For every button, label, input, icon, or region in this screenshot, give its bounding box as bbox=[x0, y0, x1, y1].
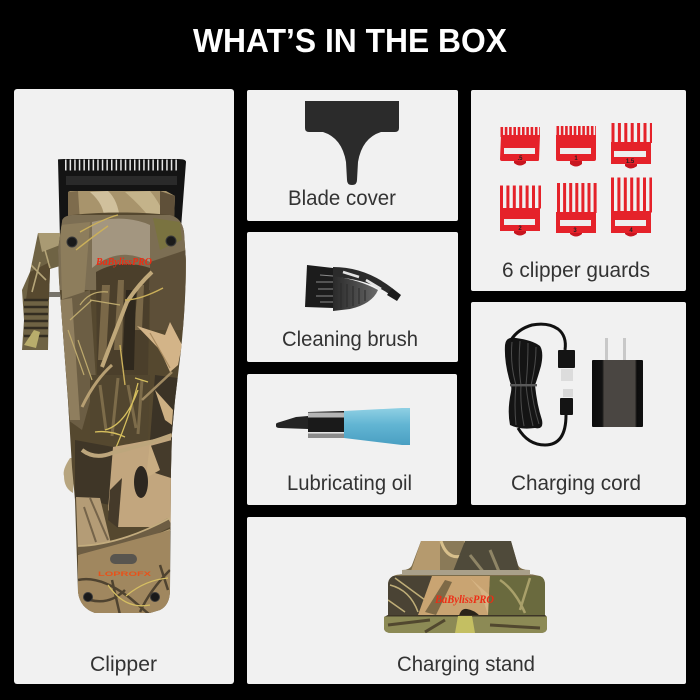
panel: charging stand bbox=[247, 517, 686, 684]
tube nozzle bbox=[276, 416, 308, 429]
guard .5 bbox=[500, 132, 540, 166]
icon: six red guards bbox=[500, 131, 652, 236]
label: charging cord: Charging cord bbox=[511, 472, 641, 495]
cord loops bbox=[511, 324, 566, 445]
usb-a plug bbox=[558, 350, 575, 368]
brush handle arm bbox=[333, 267, 392, 294]
body side bump bbox=[64, 458, 75, 493]
clipper body with camouflage bbox=[55, 210, 190, 615]
guard 3: 3 bbox=[573, 228, 577, 234]
clipper side lever bbox=[22, 233, 60, 350]
icon: oil tube bbox=[276, 408, 410, 445]
clipper model mark: LOPROFX bbox=[98, 572, 151, 578]
panel: cleaning brush bbox=[247, 232, 458, 362]
guard .5: .5 bbox=[517, 156, 523, 162]
guard 2: 2 bbox=[518, 226, 522, 232]
handle slots bbox=[343, 272, 381, 289]
panel: charging cord bbox=[471, 302, 686, 505]
icon: camo charging stand bbox=[384, 541, 547, 633]
usb-c plug bbox=[560, 398, 573, 415]
icon: cleaning brush bbox=[305, 265, 401, 311]
guard 1: 1 bbox=[574, 156, 578, 162]
icon: camo hair clipper bbox=[20, 159, 190, 615]
tube black band bbox=[308, 411, 344, 438]
band labels bbox=[308, 412, 344, 418]
guard 1 bbox=[556, 131, 596, 166]
cord bundle bbox=[505, 338, 542, 429]
icon: usb cord bbox=[505, 324, 643, 445]
camouflage stand body bbox=[384, 541, 547, 633]
tube blue body bbox=[344, 408, 410, 445]
title: WHAT’S IN THE BOX bbox=[193, 22, 507, 59]
battery indicator pill bbox=[110, 554, 137, 564]
guard 1.5 bbox=[611, 133, 652, 168]
label: charging stand: Charging stand bbox=[397, 653, 535, 676]
icon: blade cover bbox=[305, 101, 399, 185]
handle end cap bbox=[387, 288, 401, 301]
usb-a metal bbox=[561, 369, 573, 381]
guard 2 bbox=[500, 197, 541, 236]
label: cleaning brush: Cleaning brush bbox=[282, 328, 418, 351]
label: clipper guards: 6 clipper guards bbox=[502, 259, 650, 282]
panel: lubricating oil bbox=[247, 374, 457, 505]
brush bristles bbox=[305, 265, 333, 308]
clipper blade bbox=[58, 159, 186, 240]
cord strand highlights bbox=[512, 341, 539, 426]
clipper brand mark: BaBylissPRO bbox=[95, 257, 152, 268]
label: blade cover: Blade cover bbox=[288, 187, 396, 210]
handle ribs bbox=[341, 283, 365, 308]
label: clipper: Clipper bbox=[90, 653, 157, 676]
panel: clipper bbox=[14, 89, 234, 684]
adapter prongs bbox=[605, 338, 626, 361]
screws bbox=[67, 236, 176, 602]
panel: clipper guards bbox=[471, 90, 686, 291]
guard 4: 4 bbox=[629, 228, 633, 234]
guard 4 bbox=[611, 195, 652, 236]
guard 3 bbox=[556, 198, 597, 236]
adapter body bbox=[592, 360, 643, 427]
panel: blade cover bbox=[247, 90, 458, 221]
guard 1.5: 1.5 bbox=[626, 159, 635, 165]
bristle highlights bbox=[316, 275, 333, 302]
cord tie bbox=[510, 384, 537, 386]
usb-c metal bbox=[563, 389, 573, 397]
clipper neck bbox=[68, 191, 175, 224]
handle fan bbox=[333, 276, 378, 311]
label: lubricating oil: Lubricating oil bbox=[287, 472, 412, 495]
stand brand mark: BaBylissPRO bbox=[434, 594, 494, 606]
lever hinge pin bbox=[49, 292, 60, 297]
